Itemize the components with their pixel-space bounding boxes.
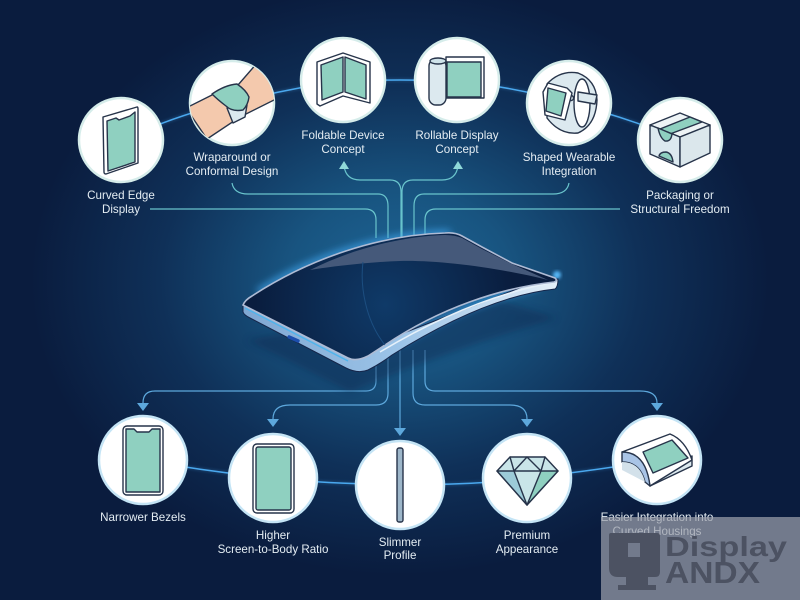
feature: Foldable Device Concept: Concept [321,143,365,156]
icon: phone side [397,448,403,522]
feature: Wraparound or Conformal Design: Wraparound or [193,151,271,164]
icon: curved edge phone [103,107,138,174]
connecting arc: top row [121,80,680,140]
feature: Shaped Wearable Integration [523,61,615,178]
feature: Packaging or Structural Freedom [630,98,730,216]
feature: Higher Screen-to-Body Ratio: Higher [256,529,290,542]
feature: Foldable Device Concept [301,38,385,156]
connecting arc: bottom row [143,460,657,484]
feature: Curved Edge Display: Display [102,203,140,216]
feature: Packaging or Structural Freedom: Structural Freedom [630,203,730,216]
feature: Rollable Display Concept: Rollable Display [415,129,499,142]
feature: Curved Edge Display [79,98,163,216]
icon: roll [429,57,484,105]
feature: Wraparound or Conformal Design: Conformal Design [186,165,278,178]
icon: watch [543,72,597,133]
feature: Premium Appearance [483,434,571,556]
feature: Narrower Bezels [99,416,187,524]
feature: Foldable Device Concept: Foldable Device [301,129,385,142]
feature: Easier Integration into Curved Housings [601,416,713,538]
feature: Premium Appearance: Premium [504,529,550,542]
feature: Slimmer Profile [356,441,444,562]
central curved phone [243,233,561,392]
feature: Rollable Display Concept: Concept [435,143,479,156]
icon: box [650,113,710,167]
connector lines to top features [150,161,620,238]
feature: Rollable Display Concept [415,38,499,156]
feature: Higher Screen-to-Body Ratio: Screen-to-Body Ratio [218,543,328,556]
watermark: Display [665,531,788,562]
watermark: ANDX [665,555,760,590]
feature: Narrower Bezels: Narrower Bezels [100,511,186,524]
icon: diamond [497,457,558,505]
watermark logo [609,533,660,590]
icon: phone with notch [123,426,163,495]
feature: Shaped Wearable Integration: Integration [542,165,596,178]
icon: curved housing [622,434,692,486]
feature: Slimmer Profile: Profile [384,549,416,562]
feature: Packaging or Structural Freedom: Packaging or [646,189,714,202]
feature: Wraparound or Conformal Design [186,61,282,178]
feature: Easier Integration into Curved Housings: Curved Housings [613,525,702,538]
feature: Easier Integration into Curved Housings: Easier Integration into [601,511,713,524]
feature: Shaped Wearable Integration: Shaped Wearable [523,151,615,164]
feature: Curved Edge Display: Curved Edge [87,189,155,202]
icon: phone full screen [253,444,294,513]
watermark [601,517,800,600]
feature: Higher Screen-to-Body Ratio [218,434,328,556]
icon: foldable [317,53,370,106]
feature: Slimmer Profile: Slimmer [379,536,421,549]
feature: Premium Appearance: Appearance [496,543,558,556]
icon: wrist band [190,66,274,138]
connector lines to bottom features [137,350,663,436]
